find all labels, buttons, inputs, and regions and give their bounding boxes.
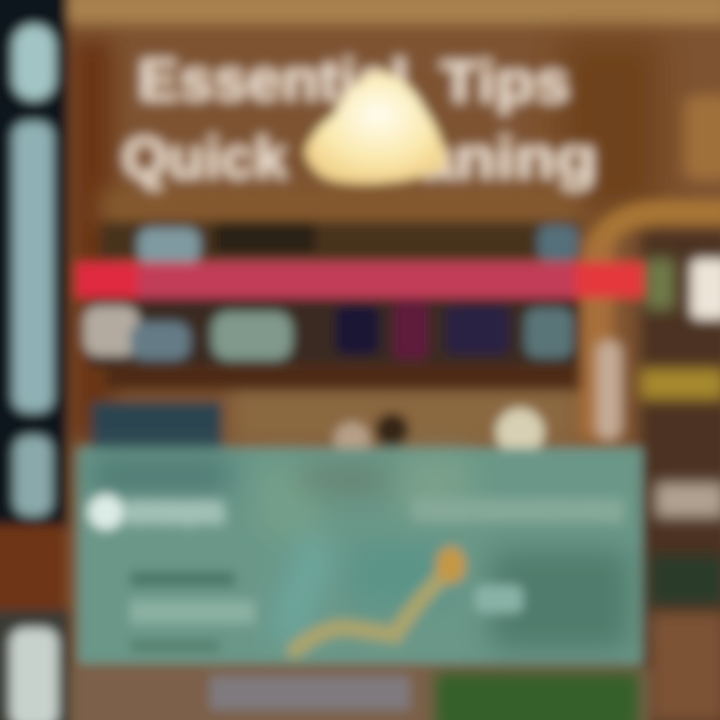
panel shading	[90, 455, 630, 650]
white object	[690, 258, 720, 320]
grey box	[210, 676, 410, 710]
left pill: short	[14, 436, 52, 516]
pale shelf items	[655, 482, 720, 518]
bottom items	[70, 668, 650, 720]
panel heading icon	[88, 494, 124, 530]
dark lower line	[130, 640, 220, 652]
left column strip	[0, 0, 70, 720]
left pill: long	[13, 122, 53, 412]
small round objects	[334, 422, 370, 458]
line chart	[295, 565, 452, 650]
dark text lines	[130, 572, 235, 586]
panel heading text	[124, 500, 224, 524]
title line 2 end: Cleaning	[312, 126, 597, 191]
chart peak	[436, 546, 466, 584]
title line 1: Essential	[138, 48, 408, 113]
title line 2: Quick	[122, 126, 288, 191]
green plant	[435, 672, 640, 720]
dark box	[92, 402, 222, 448]
dark upper item	[215, 222, 315, 254]
lime shelf tint	[645, 258, 675, 310]
middle shelf items	[84, 222, 580, 458]
lamp glow	[305, 72, 446, 183]
panel right heading text	[412, 498, 624, 522]
pale post	[580, 240, 614, 440]
right shelves	[580, 95, 720, 720]
shelf jars	[84, 306, 139, 356]
upper bottles	[138, 228, 200, 264]
pale note	[475, 585, 523, 613]
pale post highlight	[596, 340, 622, 440]
left pill: top	[13, 25, 55, 100]
teal panel: Time saved today	[412, 499, 625, 526]
pale text line	[130, 600, 255, 624]
dark green shelf	[650, 555, 720, 605]
teal panel	[78, 448, 642, 664]
yellow shelf items	[640, 368, 720, 400]
title line 1 end: Tips	[440, 50, 570, 115]
lower wood	[650, 612, 720, 720]
red banner	[76, 262, 644, 298]
orange wall block	[684, 95, 720, 180]
title	[122, 48, 597, 191]
left pill: bottom	[10, 628, 58, 720]
teal panel: Steps	[126, 498, 226, 528]
wooden arch	[595, 212, 720, 262]
